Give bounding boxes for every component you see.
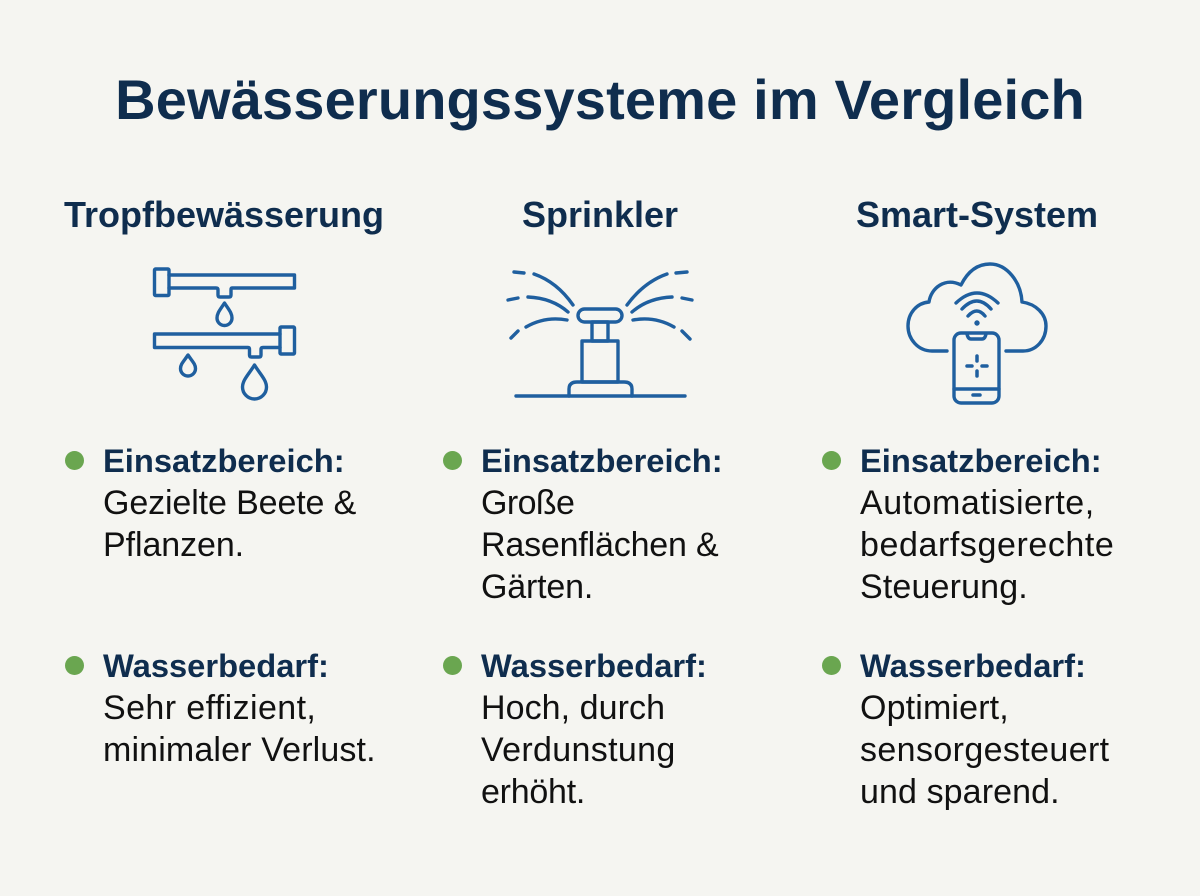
column 2: Einsatzbereich (443, 442, 723, 606)
column 3: Wasserbedarf: Optimiert, (860, 689, 1009, 727)
column 3: Einsatzbereich: Einsatzbereich: (860, 442, 1102, 479)
column 2: Einsatzbereich: Große (481, 484, 574, 522)
title: Bewässerungssysteme im Vergleich (115, 68, 1085, 131)
column 3: Wasserbedarf: sensorgesteuert (860, 731, 1110, 769)
text: Steuerung. (860, 568, 1028, 606)
column 1: Einsatzbereich: Einsatzbereich: (103, 442, 345, 479)
column 2: Wasserbedarf: Verdunstung (481, 731, 676, 769)
column 1: Wasserbedarf: Wasserbedarf: (103, 647, 329, 684)
column heading: Tropfbewässerung: Tropfbewässerung (64, 194, 384, 235)
icon: drip pipes (154, 269, 294, 399)
text: und sparend. (860, 773, 1060, 811)
column 2: Einsatzbereich: Einsatzbereich: (481, 442, 723, 479)
text: Gärten. (481, 568, 593, 606)
column 2: Wasserbedarf: Hoch, durch (481, 689, 665, 727)
column 1: Wasserbedarf: minimaler Verlust. (103, 731, 376, 769)
column 3: Einsatzbereich: Automatisierte, (860, 484, 1095, 522)
column 2: Einsatzbereich: Rasenflächen & (481, 526, 719, 564)
column 1: Einsatzbereich: Gezielte Beete & (103, 484, 356, 522)
column 2: Wasserbedarf: Wasserbedarf: (481, 647, 707, 684)
column 3: Einsatzbereich (822, 442, 1114, 606)
column 3: Wasserbedarf (822, 647, 1110, 811)
column 3: Einsatzbereich: bedarfsgerechte (860, 526, 1114, 564)
icon: cloud with phone (908, 264, 1046, 403)
column 1: Einsatzbereich (65, 442, 356, 564)
column 1: Wasserbedarf: Sehr effizient, (103, 689, 316, 727)
column 3: Wasserbedarf: Wasserbedarf: (860, 647, 1086, 684)
column 1: Einsatzbereich: Pflanzen. (103, 526, 244, 564)
column heading: Smart-System: Smart-System (856, 194, 1098, 235)
text: erhöht. (481, 773, 585, 811)
column 2: Wasserbedarf (443, 647, 707, 811)
column 1: Wasserbedarf (65, 647, 376, 769)
column heading: Sprinkler: Sprinkler (522, 194, 678, 235)
icon: sprinkler (508, 272, 692, 396)
